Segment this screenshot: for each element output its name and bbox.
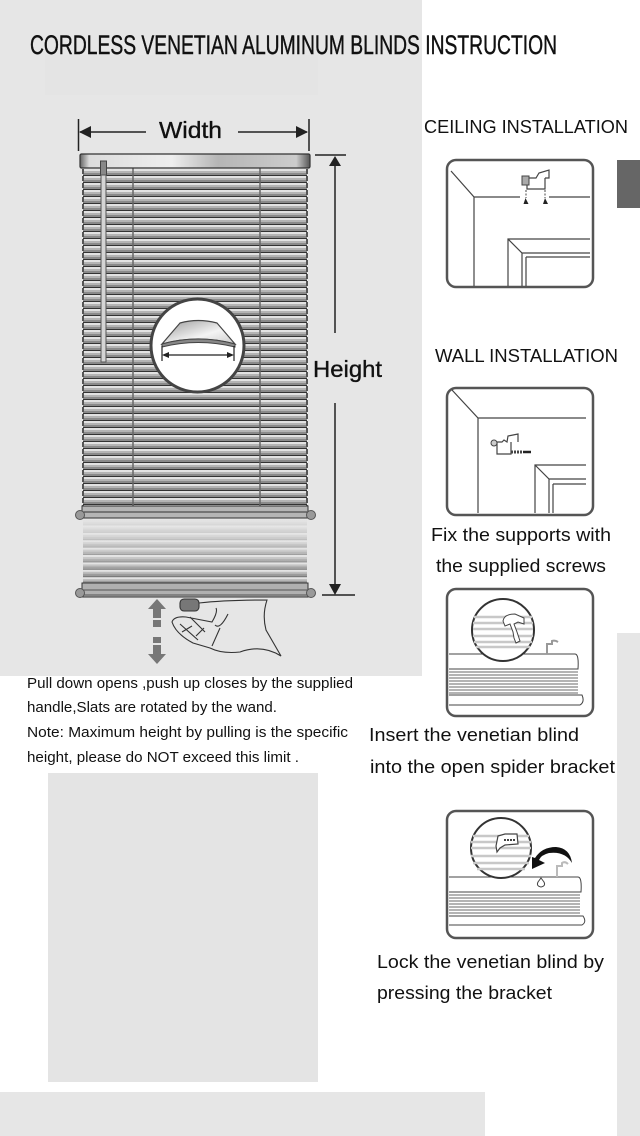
venetian blind diagram — [76, 154, 316, 598]
magnifier circle — [472, 599, 534, 661]
diagram: insert blind into bracket — [447, 589, 593, 716]
width dimension — [78, 117, 309, 151]
icon: ceiling bracket and screws — [522, 170, 549, 204]
caption: lock blind: pressing the bracket — [377, 982, 552, 1003]
head rail — [80, 154, 310, 168]
caption: insert blind: into the open spider bracket — [370, 756, 615, 777]
background panel: main grey — [0, 0, 422, 676]
diagram: ceiling installation — [447, 160, 593, 287]
instruction text block: Note: Maximum height by pulling is the specific — [27, 725, 348, 741]
heading: ceiling installation: CEILING INSTALLATION — [424, 116, 628, 137]
icon: wall bracket and screw — [491, 434, 531, 454]
caption: fix supports — [431, 524, 611, 576]
icon: curved arrow — [532, 847, 572, 869]
instruction text block — [27, 676, 353, 766]
height dimension: Height — [313, 356, 383, 382]
caption: lock blind: Lock the venetian blind by — [377, 951, 605, 972]
caption: lock blind — [377, 951, 605, 1003]
ladder cords — [133, 167, 260, 508]
height dimension — [313, 155, 383, 595]
background panel: faint title band — [45, 55, 318, 95]
dark grey side tab — [617, 160, 640, 208]
icon: hand pulling handle — [172, 599, 281, 656]
slat close-up circle — [151, 299, 244, 392]
blind headrail and slats — [449, 862, 585, 925]
background panel: lower grey block — [48, 773, 318, 1082]
magnifier circle — [471, 818, 531, 878]
background panel: bottom grey strip — [0, 1092, 485, 1136]
icon: up and down arrows — [148, 599, 166, 664]
heading: wall installation: WALL INSTALLATION — [435, 345, 618, 366]
lowered slats — [83, 519, 307, 583]
caption: insert blind: Insert the venetian blind — [369, 724, 579, 745]
caption: fix supports: the supplied screws — [436, 555, 606, 576]
bottom rail — [76, 583, 316, 598]
tilt wand — [100, 161, 106, 362]
caption: insert blind — [369, 724, 615, 777]
middle rail — [76, 506, 316, 520]
instruction text block: handle,Slats are rotated by the wand. — [27, 700, 277, 716]
caption: fix supports: Fix the supports with — [431, 524, 611, 545]
width dimension: Width — [159, 117, 222, 143]
diagram: wall installation — [447, 388, 593, 515]
blind headrail and slats — [449, 641, 583, 705]
instruction text block: height, please do NOT exceed this limit . — [27, 750, 299, 766]
slats — [83, 169, 307, 512]
diagram: lock blind by pressing bracket — [447, 811, 593, 938]
background panel: right grey strip — [617, 633, 640, 1136]
instruction text block: Pull down opens ,push up closes by the supplied — [27, 676, 353, 692]
slat side edges — [83, 169, 307, 510]
